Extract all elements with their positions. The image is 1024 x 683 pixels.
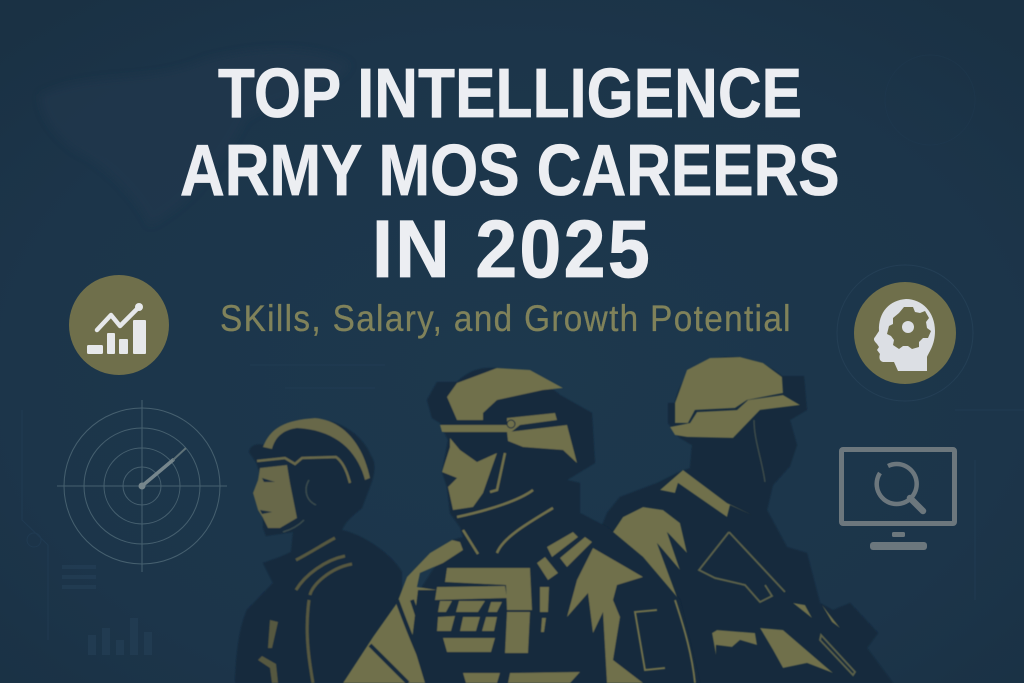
soldier: right figure silhouette: [590, 357, 893, 683]
centre soldier vest plates: [435, 532, 592, 683]
title line 3: IN 2025: [372, 203, 650, 295]
title line 2: ARMY MOS CAREERS: [180, 131, 840, 211]
soldier: left figure: [235, 418, 402, 683]
centre soldier silhouette: [420, 368, 700, 683]
title line 1: TOP INTELLIGENCE: [218, 54, 802, 132]
right soldier collar: [660, 470, 752, 517]
right soldier hands: [712, 628, 833, 673]
centre soldier face: [442, 438, 497, 510]
subtitle: SKills, Salary, and Growth Potential: [220, 298, 791, 339]
soldier: right figure details: [613, 357, 855, 683]
left soldier body accents: [296, 538, 352, 683]
centre soldier straps: [457, 453, 553, 554]
title: [180, 54, 840, 295]
left soldier helmet accent: [257, 457, 350, 483]
centre soldier helmet band: [440, 413, 557, 441]
centre soldier helmet lower right: [508, 425, 577, 463]
right soldier helmet lower: [670, 395, 800, 438]
right soldier shoulder: [613, 507, 687, 597]
centre soldier right shoulder: [567, 548, 643, 683]
icon: growth chart badge: [69, 275, 169, 375]
icon: head with gear badge: [837, 265, 973, 401]
left soldier eye and mouth: [260, 478, 275, 514]
icon: radar: [57, 400, 227, 572]
left soldier silhouette: [235, 419, 402, 683]
centre soldier left arm: [343, 540, 463, 683]
right soldier rifle outline: [699, 532, 855, 675]
centre soldier arm cuts: [370, 600, 440, 683]
right soldier face line: [754, 420, 765, 482]
icon: monitor with magnifier: [842, 450, 954, 550]
right soldier helmet upper: [675, 357, 783, 423]
left soldier face: [253, 465, 297, 528]
soldier: centre figure: [343, 368, 700, 683]
centre soldier dome: [447, 368, 563, 420]
faint world map texture: [40, 49, 350, 225]
faint bar chart texture: [62, 565, 152, 655]
